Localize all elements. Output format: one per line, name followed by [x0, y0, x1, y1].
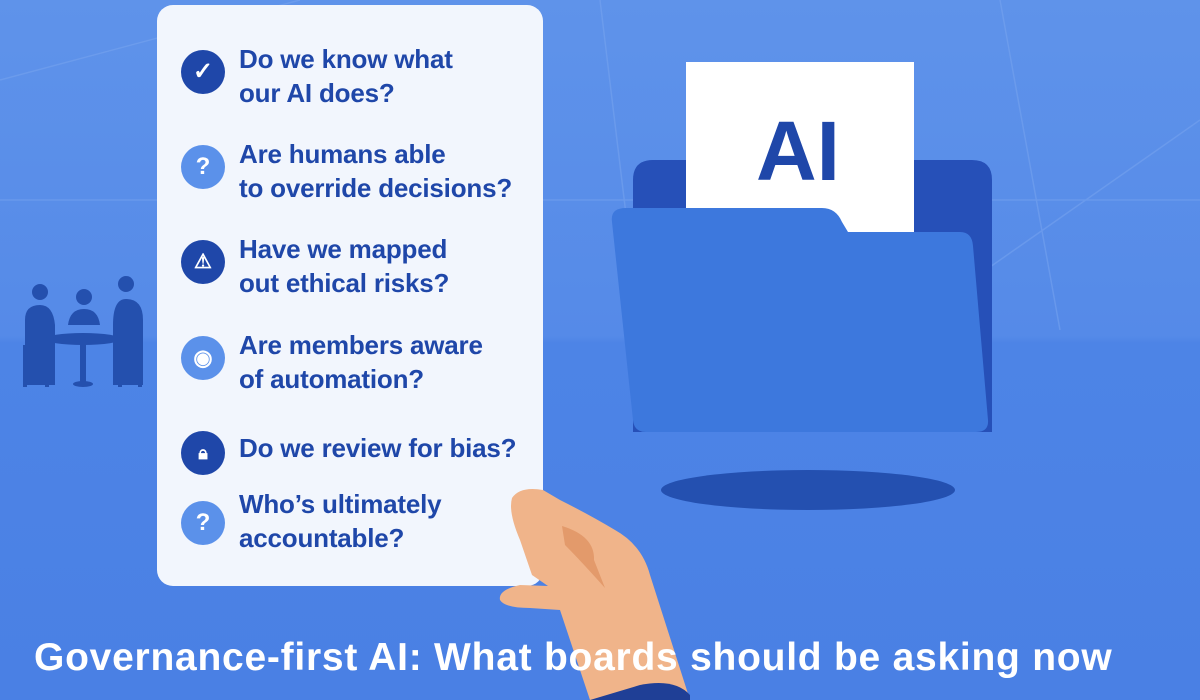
question 6: accountable? [239, 523, 404, 553]
question 6: ? [196, 509, 210, 536]
question 2: to override decisions? [239, 173, 512, 203]
question 1: Do we know what [239, 44, 453, 74]
question 4: of automation? [239, 364, 424, 394]
question 1: ✓ [193, 58, 213, 85]
question 3 [181, 234, 449, 298]
panel: question card [157, 5, 543, 586]
question 3: Have we mapped [239, 234, 447, 264]
question 1 [181, 44, 453, 108]
question 4: Are members aware [239, 330, 483, 360]
title: Governance-first AI: What boards should be asking now [34, 636, 1112, 679]
question 6: Who’s ultimately [239, 489, 441, 519]
question 4 [181, 330, 483, 394]
icon: AI folder [612, 62, 992, 510]
question 3: ⚠ [194, 251, 212, 273]
question 6 [181, 489, 442, 553]
question 3: out ethical risks? [239, 268, 449, 298]
question 5: 🔒︎ [198, 443, 208, 463]
question 4: ◉ [193, 345, 213, 370]
question 5: Do we review for bias? [239, 433, 516, 463]
icon: AI folder: AI [756, 104, 840, 198]
question 2: Are humans able [239, 139, 446, 169]
question 2: ? [196, 153, 210, 180]
question 1: our AI does? [239, 78, 395, 108]
icon: board meeting [23, 276, 143, 387]
question 2 [181, 139, 512, 203]
question 5 [181, 431, 516, 475]
